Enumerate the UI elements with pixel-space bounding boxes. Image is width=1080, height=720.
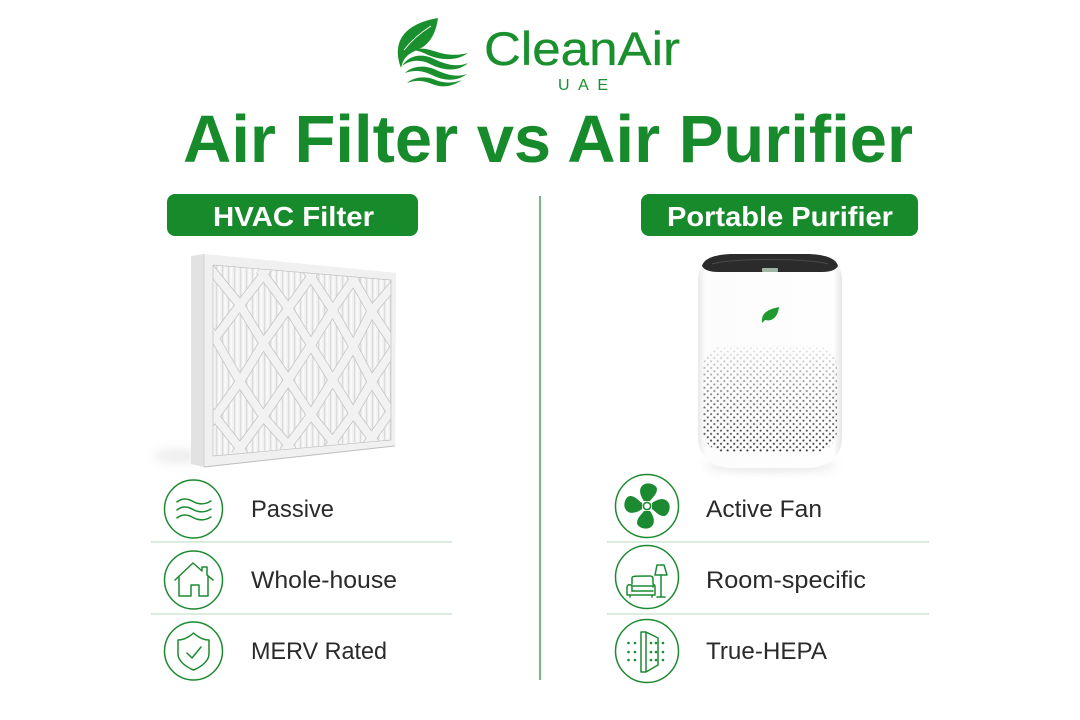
feature: Whole-house: Whole-house bbox=[251, 567, 397, 594]
icon: leaf and waves bbox=[398, 18, 468, 86]
heading: HVAC Filter: HVAC Filter bbox=[213, 201, 374, 232]
divider bbox=[539, 196, 541, 680]
brand name: CleanAir bbox=[484, 22, 680, 75]
heading: Portable Purifier bbox=[641, 194, 918, 236]
feature: MERV Rated bbox=[164, 622, 387, 680]
brand sub-label: UAE bbox=[558, 77, 608, 94]
feature: Whole-house bbox=[164, 551, 397, 609]
icon: air waves bbox=[164, 480, 222, 538]
icon: shield check bbox=[164, 622, 222, 680]
feature: Room-specific: Room-specific bbox=[706, 567, 866, 594]
illustration: air purifier bbox=[698, 254, 842, 470]
heading: HVAC Filter bbox=[167, 194, 418, 236]
panel: portable purifier bbox=[607, 194, 929, 682]
icon: sofa and lamp bbox=[616, 546, 678, 608]
feature: Room-specific bbox=[616, 546, 866, 608]
feature: Passive: Passive bbox=[251, 496, 334, 523]
icon: HEPA filter panel bbox=[616, 620, 678, 682]
feature: Active Fan bbox=[616, 474, 822, 538]
icon: leaf badge bbox=[762, 307, 779, 323]
icon: fan bbox=[616, 474, 678, 538]
feature: True-HEPA: True-HEPA bbox=[706, 638, 827, 665]
logo bbox=[398, 18, 680, 94]
feature: Active Fan: Active Fan bbox=[706, 496, 822, 523]
icon: house bbox=[164, 551, 222, 609]
title: Air Filter vs Air Purifier bbox=[183, 102, 913, 177]
panel: HVAC filter bbox=[151, 194, 452, 680]
feature: Passive bbox=[164, 480, 334, 538]
feature: MERV Rated: MERV Rated bbox=[251, 638, 387, 665]
heading: Portable Purifier: Portable Purifier bbox=[667, 201, 893, 232]
illustration: pleated filter bbox=[154, 254, 397, 467]
feature: True-HEPA bbox=[616, 620, 827, 682]
